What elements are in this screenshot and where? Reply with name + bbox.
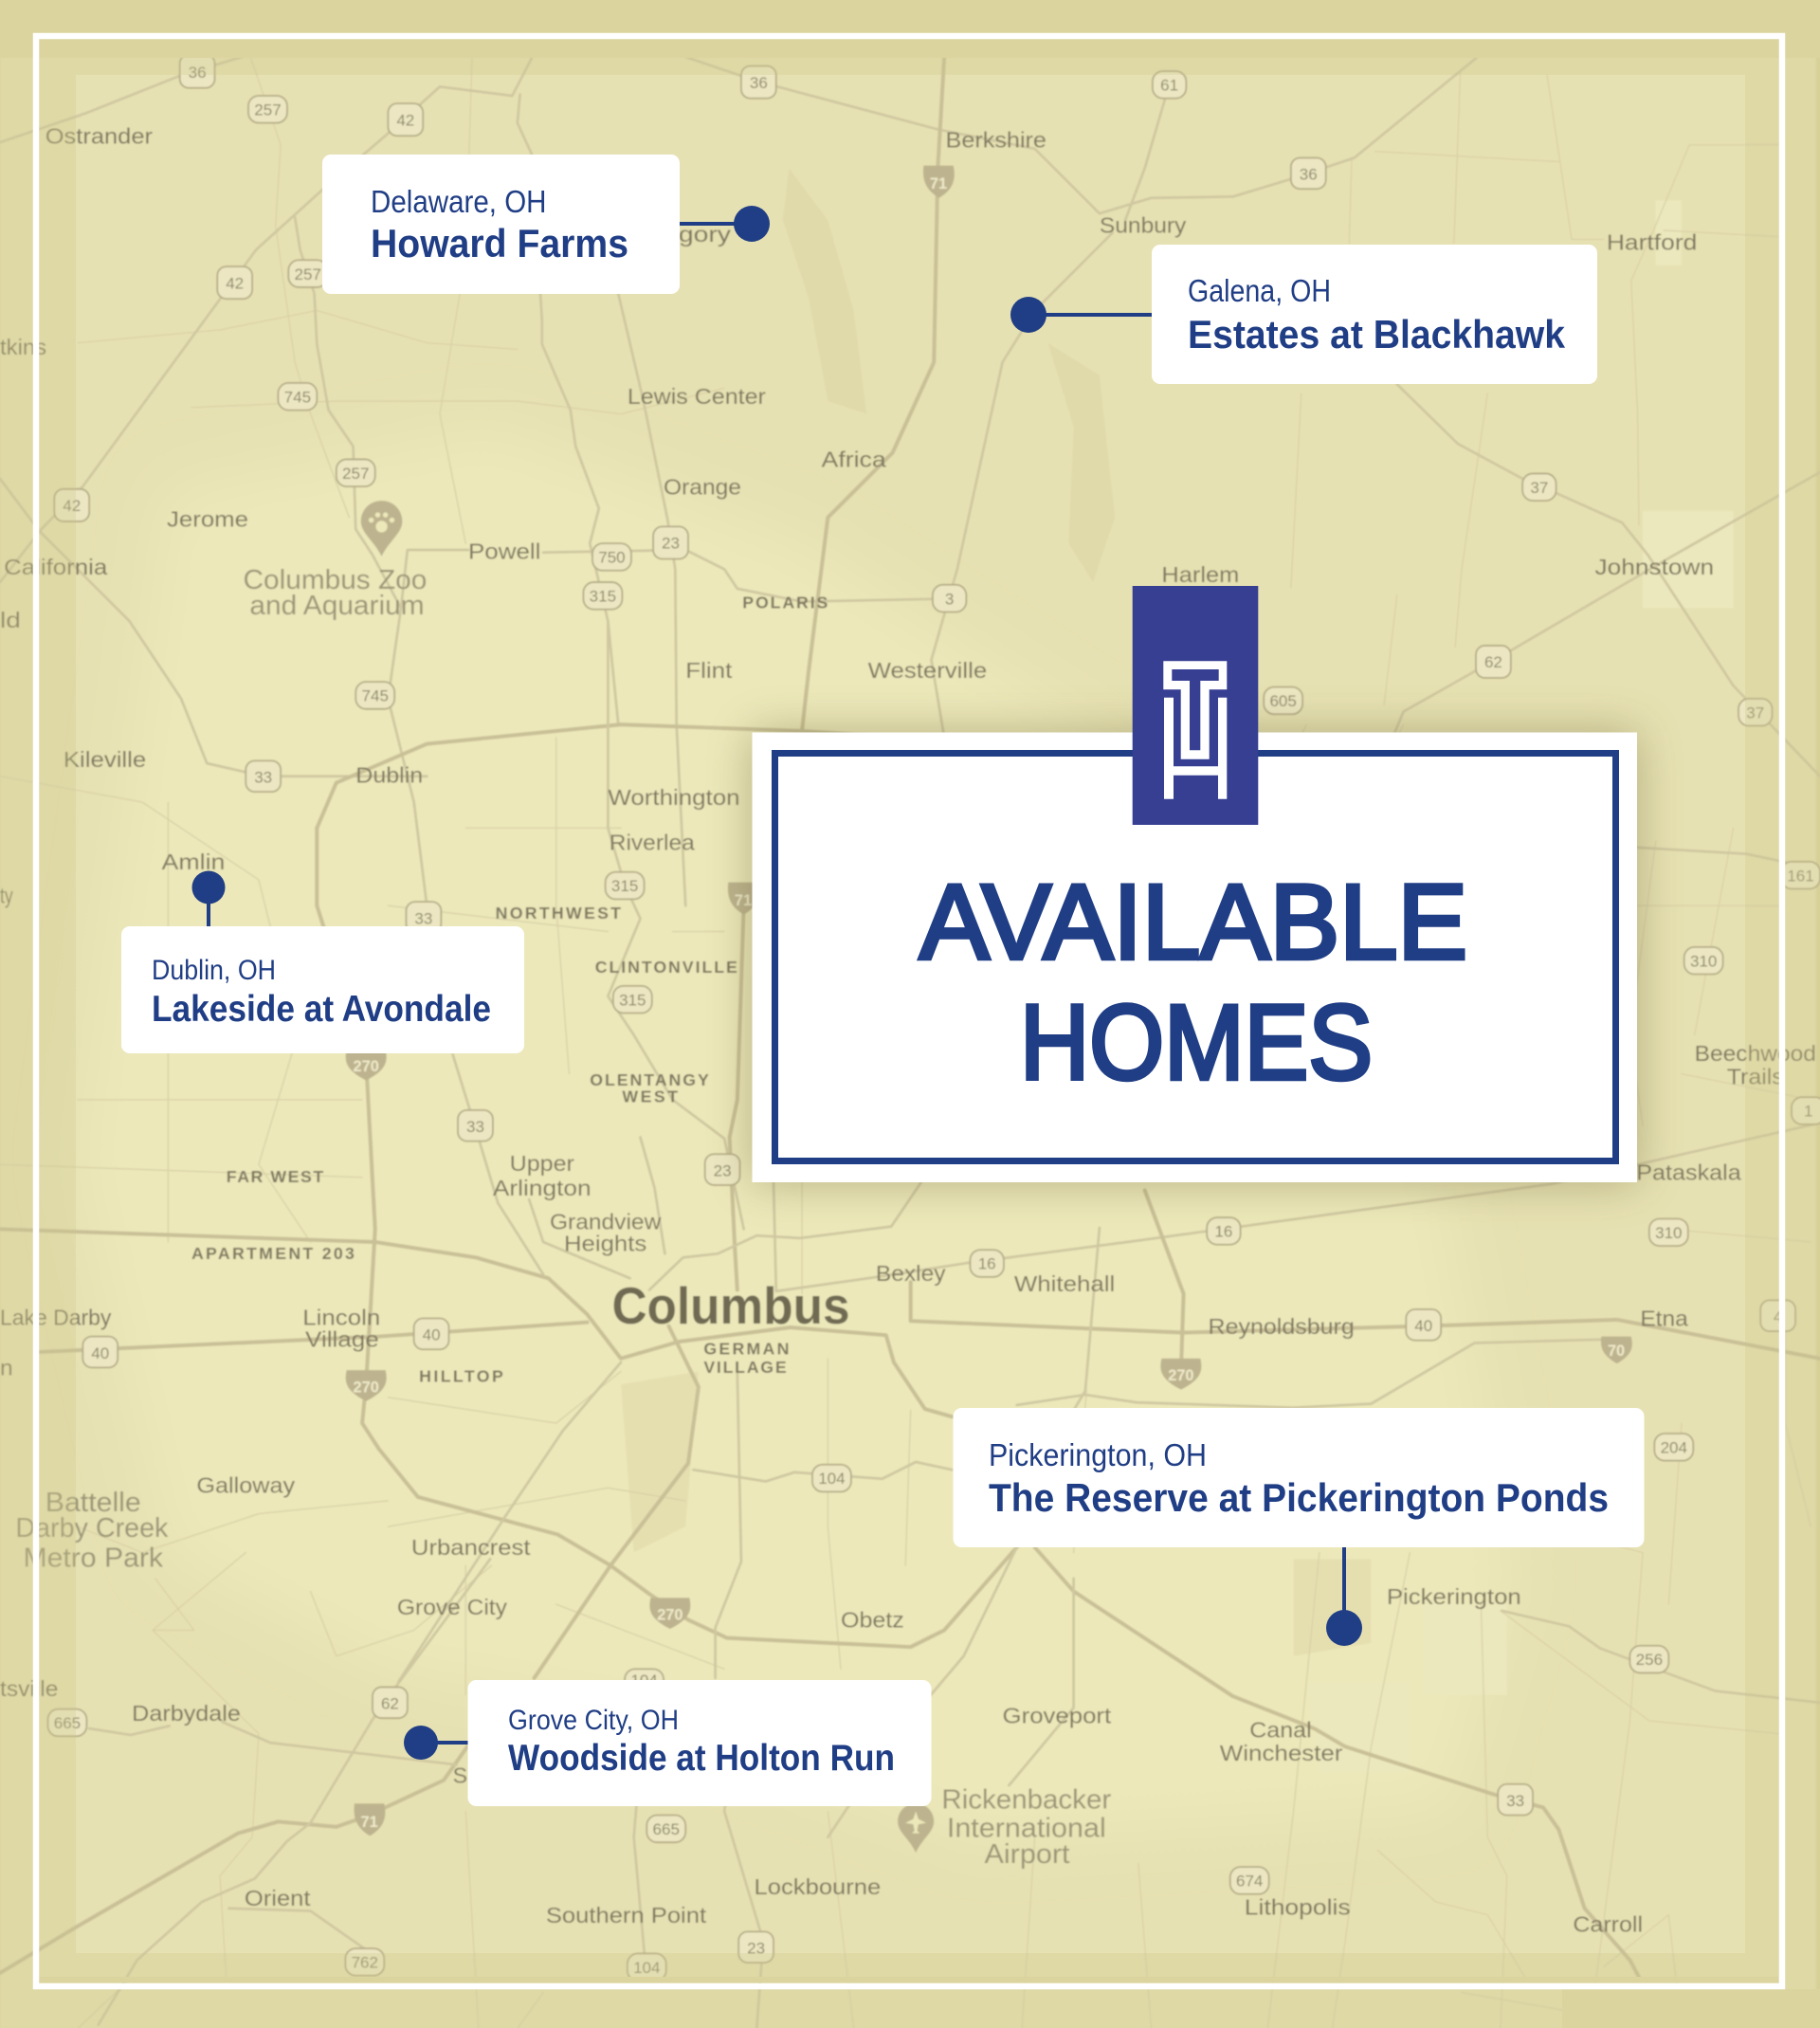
route shields: 3 [945, 590, 954, 608]
place labels: Winchester [1220, 1741, 1343, 1765]
route shields: 104 [633, 1959, 661, 1977]
route shields: 204 [1661, 1438, 1687, 1456]
place labels: Lockbourne [755, 1874, 881, 1899]
place labels: Southern Point [546, 1903, 707, 1928]
title: AVAILABLE [919, 863, 1467, 981]
place labels: Whitehall [1014, 1271, 1115, 1296]
route shields: 33 [466, 1118, 484, 1136]
route shields: 315 [611, 877, 638, 895]
place labels: Columbus [611, 1277, 850, 1335]
place labels: Reynoldsburg [1209, 1314, 1355, 1339]
place labels: WEST [622, 1087, 678, 1106]
place labels: Ostrander [46, 123, 153, 148]
place labels: Gregory [634, 222, 731, 247]
callout: Woodside at Holton Run: Woodside at Holton Run [508, 1738, 895, 1779]
route shields: 33 [414, 909, 432, 927]
place labels: Airport [984, 1839, 1070, 1870]
place labels: Arlington [493, 1176, 592, 1200]
place labels: ty [0, 883, 13, 907]
route shields: 257 [342, 465, 369, 483]
place labels: Lithopolis [1245, 1895, 1351, 1920]
place labels: Lake Darby [0, 1305, 112, 1329]
route shields: 310 [1655, 1224, 1683, 1242]
route shields: 104 [630, 1672, 658, 1690]
route shields: 36 [1300, 166, 1318, 184]
icon: zoo paw pin [361, 501, 402, 557]
place labels: Groveport [1003, 1704, 1112, 1728]
route shields: 70 [1608, 1343, 1625, 1360]
place labels: Obetz [841, 1608, 904, 1633]
place labels: Trails [1727, 1065, 1784, 1089]
route shields: 42 [226, 274, 244, 292]
title: HOMES [1020, 983, 1373, 1102]
place labels: and Aquarium [249, 591, 425, 621]
route shields: 745 [362, 687, 389, 705]
place labels: Westerville [868, 658, 987, 683]
place labels: VILLAGE [703, 1358, 787, 1377]
place labels: NORTHWEST [496, 904, 621, 923]
place labels: Orient [245, 1886, 311, 1910]
route shields: 42 [63, 497, 81, 515]
route shields: 71 [930, 175, 947, 192]
place labels: S [453, 1763, 467, 1787]
route shields: 762 [352, 1954, 378, 1972]
place labels: Lincoln [302, 1305, 380, 1329]
route shields: 23 [662, 535, 680, 553]
route shields: 161 [1787, 867, 1814, 885]
place labels: Dublin [355, 763, 423, 788]
place labels: GERMAN [703, 1340, 789, 1359]
place labels: POLARIS [742, 593, 828, 612]
logo tab with TH monogram [1133, 586, 1258, 825]
route shields: 37 [1746, 703, 1764, 722]
place labels: Columbus Zoo [244, 565, 427, 595]
route shields: 665 [54, 1714, 81, 1732]
place labels: Pickerington [1387, 1584, 1521, 1609]
place labels: tsville [0, 1676, 58, 1701]
place labels: Kileville [64, 747, 146, 772]
route shields: 62 [381, 1695, 399, 1713]
place labels: Jerome [167, 506, 248, 531]
route shields: 104 [818, 1470, 846, 1488]
place labels: Canal [1249, 1718, 1312, 1743]
place labels: n [0, 1356, 13, 1380]
place labels: Beechwood [1695, 1041, 1816, 1066]
place labels: Orange [664, 474, 741, 499]
route shields: 665 [653, 1820, 680, 1838]
route shields: 36 [189, 64, 207, 82]
route shields: 270 [354, 1058, 379, 1075]
place labels: OLENTANGY [590, 1070, 709, 1089]
callout: Woodside at Holton Run: Grove City, OH [508, 1705, 679, 1736]
place labels: Upper [510, 1151, 574, 1176]
route shields: 745 [284, 388, 311, 406]
panel: available homes title [753, 586, 1637, 1182]
place labels: Etna [1640, 1306, 1688, 1331]
place labels: Grove City [397, 1595, 507, 1619]
place labels: International [947, 1814, 1106, 1844]
place labels: HILLTOP [419, 1366, 503, 1385]
callout: Lakeside at Avondale [121, 870, 524, 1053]
route shields: 16 [978, 1255, 996, 1273]
place labels: Berkshire [946, 128, 1046, 153]
title [919, 863, 1467, 1102]
callout: Lakeside at Avondale: Dublin, OH [152, 955, 276, 986]
place labels: FAR WEST [227, 1167, 323, 1186]
route shields: 33 [1506, 1792, 1524, 1810]
route shields: 674 [1236, 1873, 1263, 1891]
route shields: 270 [354, 1379, 379, 1396]
place labels: APARTMENT 203 [191, 1244, 355, 1263]
place labels: ld [0, 608, 21, 632]
route shields: 36 [750, 74, 768, 92]
place labels: tkins [0, 335, 46, 359]
route shields: 315 [590, 588, 616, 606]
route shields: 257 [295, 265, 321, 283]
route shields: 23 [747, 1940, 765, 1958]
route shields: 71 [735, 892, 752, 909]
route shields: 40 [423, 1326, 441, 1344]
place labels: Powell [468, 539, 540, 564]
callout: Howard Farms: Delaware, OH [371, 184, 546, 219]
route shields: 257 [254, 100, 282, 119]
place labels: Worthington [608, 785, 740, 810]
callout: Woodside at Holton Run [404, 1680, 931, 1806]
route shields: 23 [714, 1161, 732, 1179]
route shields: 61 [1160, 77, 1178, 95]
place labels: Metro Park [24, 1544, 164, 1574]
place labels: Flint [685, 658, 733, 683]
callout: The Reserve at Pickerington Ponds: Pickerington, OH [989, 1437, 1207, 1472]
place labels: Grandview [550, 1209, 662, 1233]
callout: The Reserve at Pickerington Ponds: The Reserve at Pickerington Ponds [989, 1475, 1609, 1520]
route shields: 4 [1774, 1308, 1782, 1326]
place labels: Darbydale [132, 1701, 241, 1726]
place labels: Riverlea [610, 831, 695, 855]
route shields: 16 [1214, 1223, 1232, 1241]
place labels: Johnstown [1595, 555, 1714, 579]
route shields: 42 [396, 111, 414, 129]
place labels: Amlin [162, 850, 225, 874]
place labels: Rickenbacker [941, 1785, 1112, 1816]
route shields: 605 [1269, 692, 1297, 710]
route shields: 62 [1484, 653, 1502, 671]
route shields: 270 [1168, 1367, 1194, 1384]
place labels: Pataskala [1636, 1160, 1741, 1185]
place labels: Sunbury [1100, 213, 1187, 238]
callout: The Reserve at Pickerington Ponds [954, 1408, 1644, 1646]
route shields: 270 [657, 1606, 683, 1623]
route shields: 71 [360, 1814, 378, 1831]
place labels: Urbancrest [411, 1535, 531, 1560]
route shields: 315 [619, 991, 646, 1009]
place labels: Africa [822, 448, 886, 472]
place labels: Harlem [1161, 562, 1239, 587]
place labels: Hartford [1607, 229, 1697, 254]
place labels: Bexley [876, 1261, 946, 1286]
place labels: Battelle [46, 1488, 141, 1518]
callout: Estates at Blackhawk: Galena, OH [1188, 273, 1331, 308]
route shields: 310 [1690, 952, 1717, 970]
route shields: 256 [1636, 1651, 1663, 1669]
place labels: Lewis Center [628, 384, 766, 409]
route shields: 750 [598, 549, 626, 567]
place labels: Darby Creek [15, 1513, 169, 1544]
route shields: 40 [1414, 1317, 1432, 1335]
route shields: 40 [91, 1344, 109, 1362]
place labels: California [4, 555, 107, 579]
place labels: Village [305, 1327, 379, 1352]
callout: Estates at Blackhawk: Estates at Blackhawk [1188, 312, 1566, 356]
callout: Estates at Blackhawk [1010, 245, 1597, 384]
route shields: 1 [1804, 1103, 1812, 1121]
route shields: 33 [254, 769, 272, 787]
route shields: 37 [1530, 479, 1548, 497]
callout: Howard Farms: Howard Farms [371, 221, 628, 265]
callout: Howard Farms [322, 155, 770, 294]
place labels: Carroll [1573, 1911, 1643, 1936]
callout: Lakeside at Avondale: Lakeside at Avondale [152, 989, 491, 1030]
place labels: Heights [564, 1232, 646, 1256]
place labels: CLINTONVILLE [595, 958, 737, 977]
icon: airport pin [898, 1803, 934, 1853]
place labels: Galloway [196, 1473, 296, 1498]
